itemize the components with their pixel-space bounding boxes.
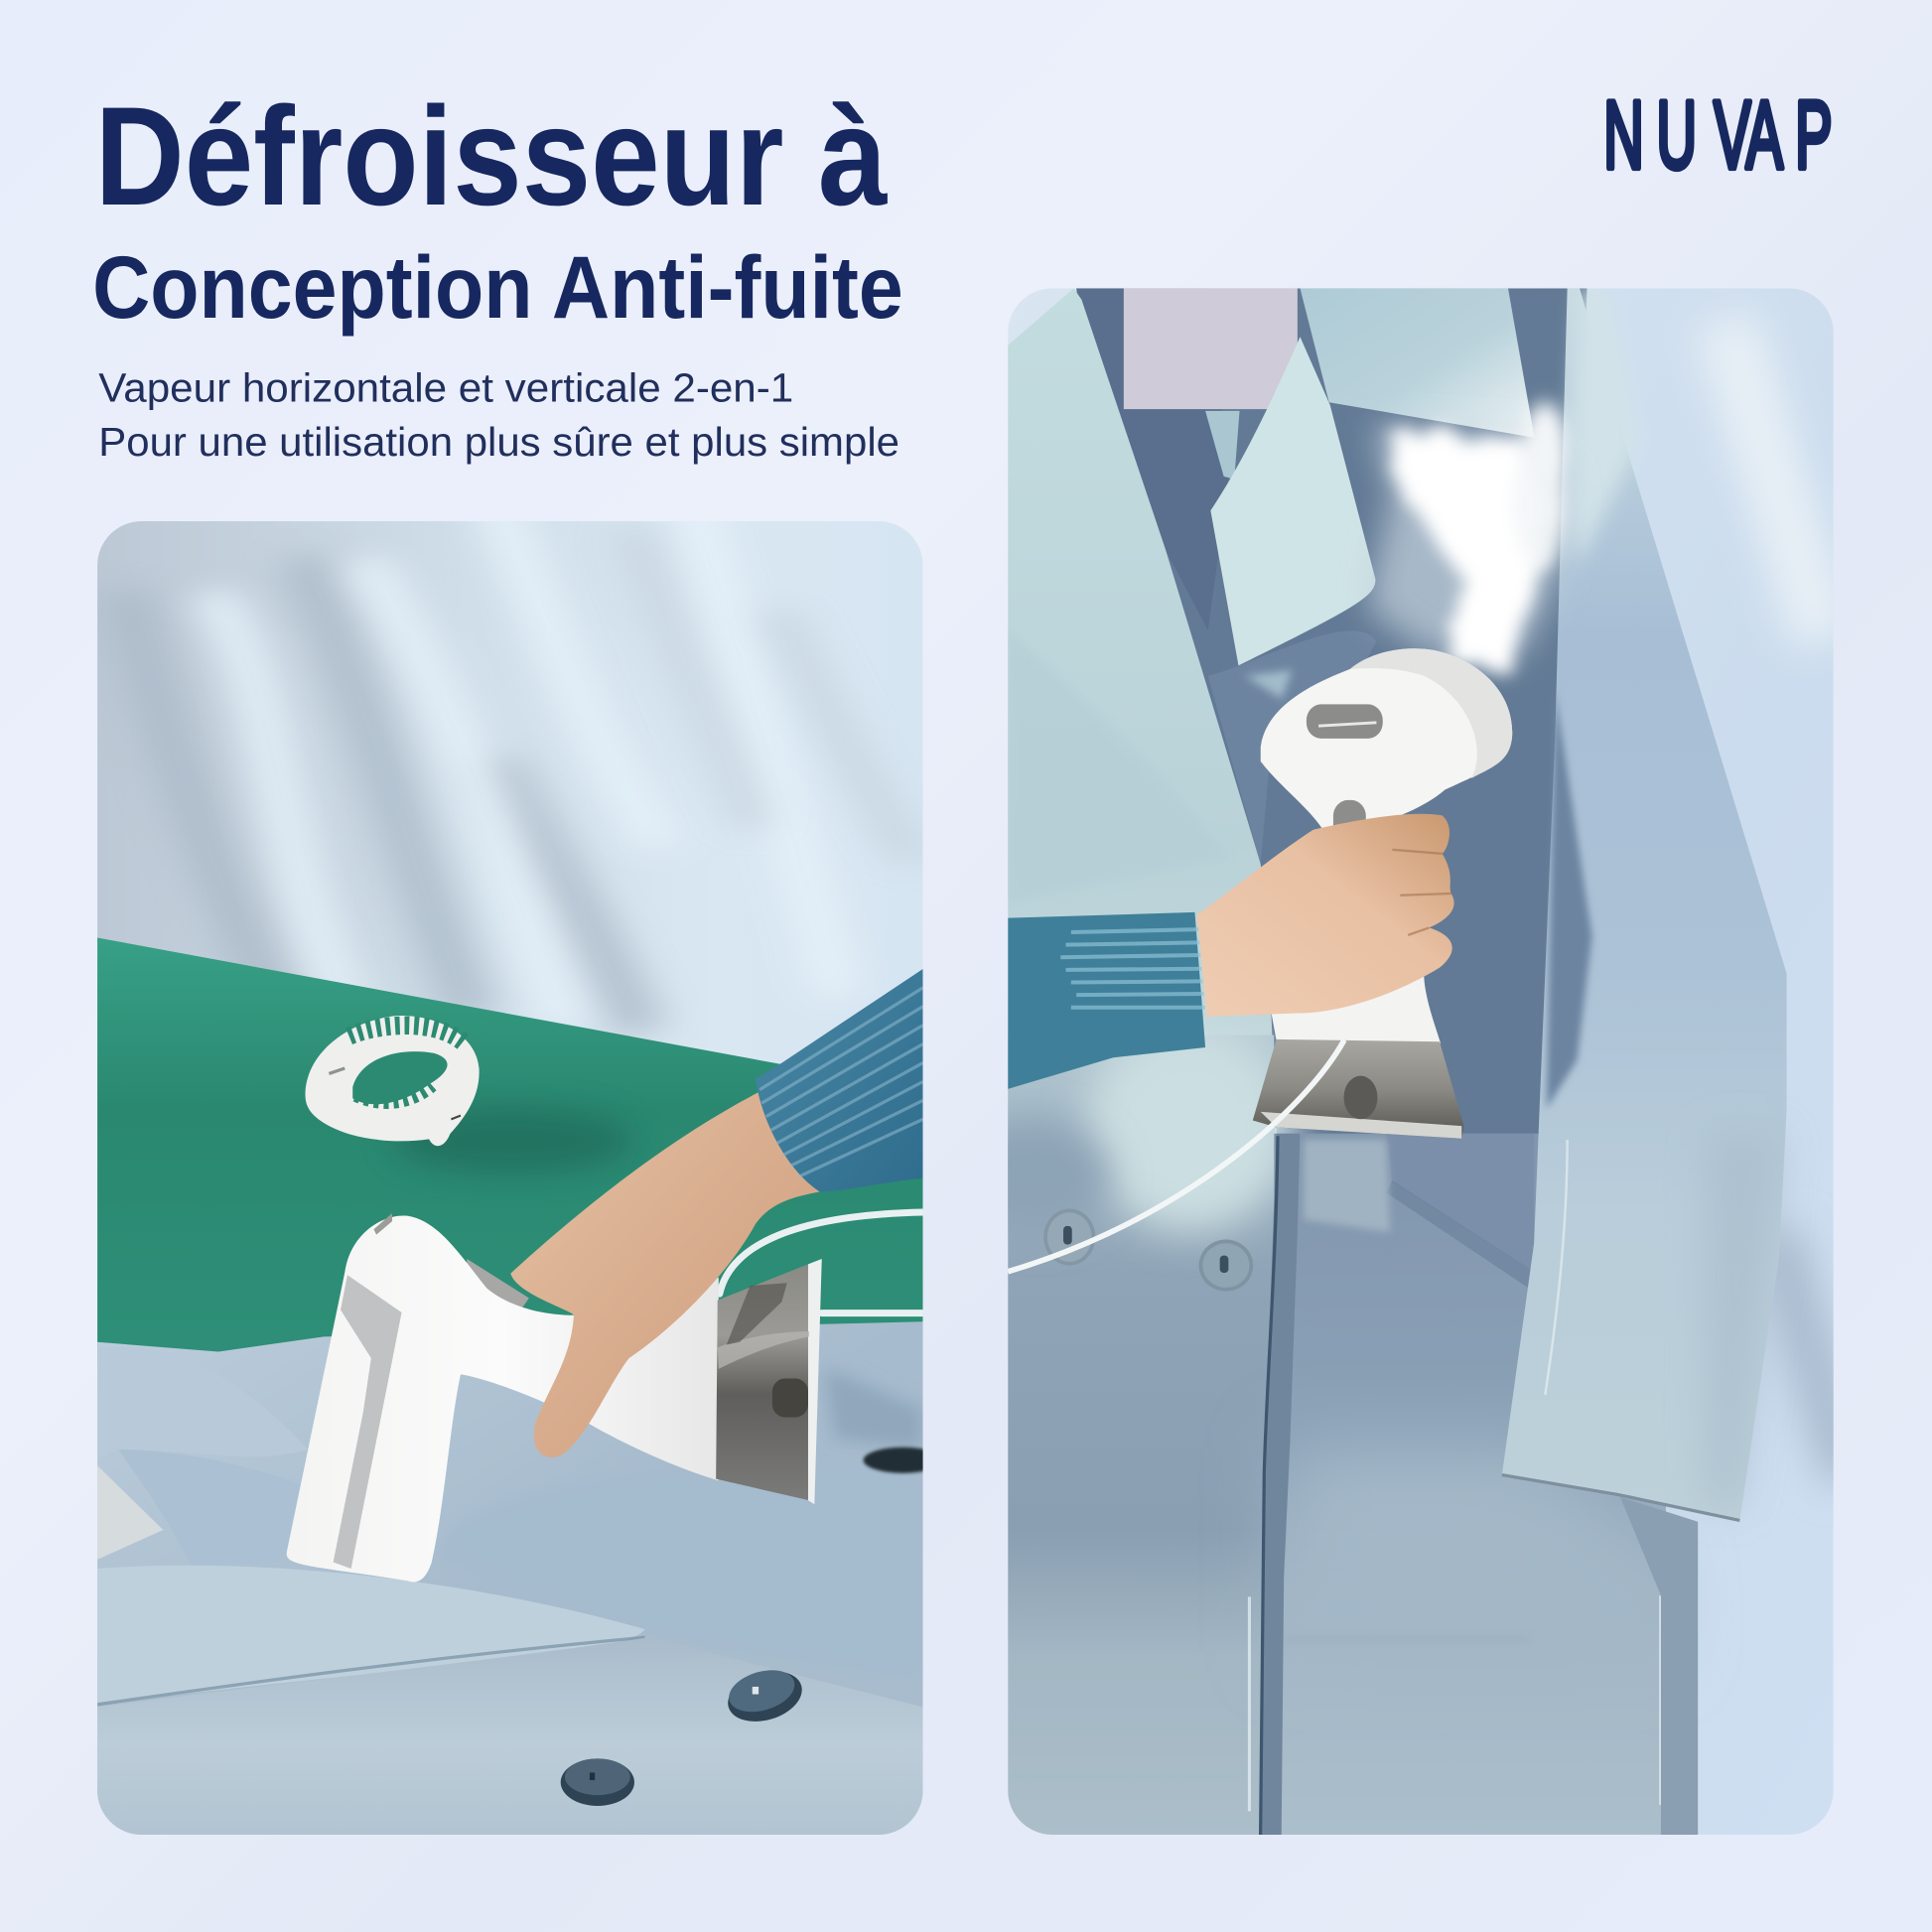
power cord — [1008, 1039, 1344, 1272]
title: Conception Anti-fuite — [92, 237, 903, 337]
subtitle text: Pour une utilisation plus sûre et plus simple — [98, 419, 899, 465]
hand — [510, 1092, 820, 1457]
accessory: brush ring — [306, 1016, 480, 1146]
panel: horizontal steaming photo — [97, 504, 942, 1835]
lower front left of coat — [961, 1023, 1294, 1835]
knit sleeve — [756, 969, 923, 1191]
placket — [1261, 1134, 1300, 1835]
right coat panel and sleeve — [1502, 288, 1787, 1520]
title: Défroisseur à — [95, 77, 889, 234]
ring shadow — [392, 1109, 634, 1173]
steamer — [1253, 648, 1512, 1139]
buttons — [561, 1663, 808, 1806]
coat buttons — [1043, 1208, 1253, 1292]
wall backdrop — [1008, 288, 1849, 1835]
pocket seam — [1284, 1637, 1528, 1640]
collar lapel — [1210, 337, 1375, 665]
upper collar — [1301, 288, 1535, 438]
knit sleeve — [1008, 912, 1205, 1089]
left lapel — [1008, 288, 1279, 1181]
brand logo: NUVAP — [1603, 80, 1833, 189]
lower front centre of coat — [1274, 1134, 1666, 1835]
subtitle text: Vapeur horizontale et verticale 2-en-1 — [98, 365, 793, 411]
green table — [97, 937, 923, 1368]
dark slot — [864, 1448, 942, 1473]
power cord — [720, 1212, 929, 1313]
fabric: garment on table — [97, 1321, 923, 1835]
steam cloud — [1366, 402, 1572, 670]
hanger and shirt — [1124, 288, 1298, 480]
inner shading — [1208, 630, 1376, 864]
fabric: lower lapel fold — [97, 1566, 645, 1705]
wall backdrop with light stripes — [97, 521, 923, 1064]
panel: vertical steaming photo — [961, 288, 1849, 1835]
right edge of body — [1620, 1497, 1698, 1835]
fabric: lower front — [97, 1637, 923, 1835]
dark lining — [1076, 288, 1587, 1181]
steamer — [287, 1213, 822, 1582]
title — [92, 77, 903, 337]
seam highlights — [1249, 1595, 1661, 1811]
hand — [1196, 814, 1454, 1017]
subtitle text — [98, 365, 899, 465]
